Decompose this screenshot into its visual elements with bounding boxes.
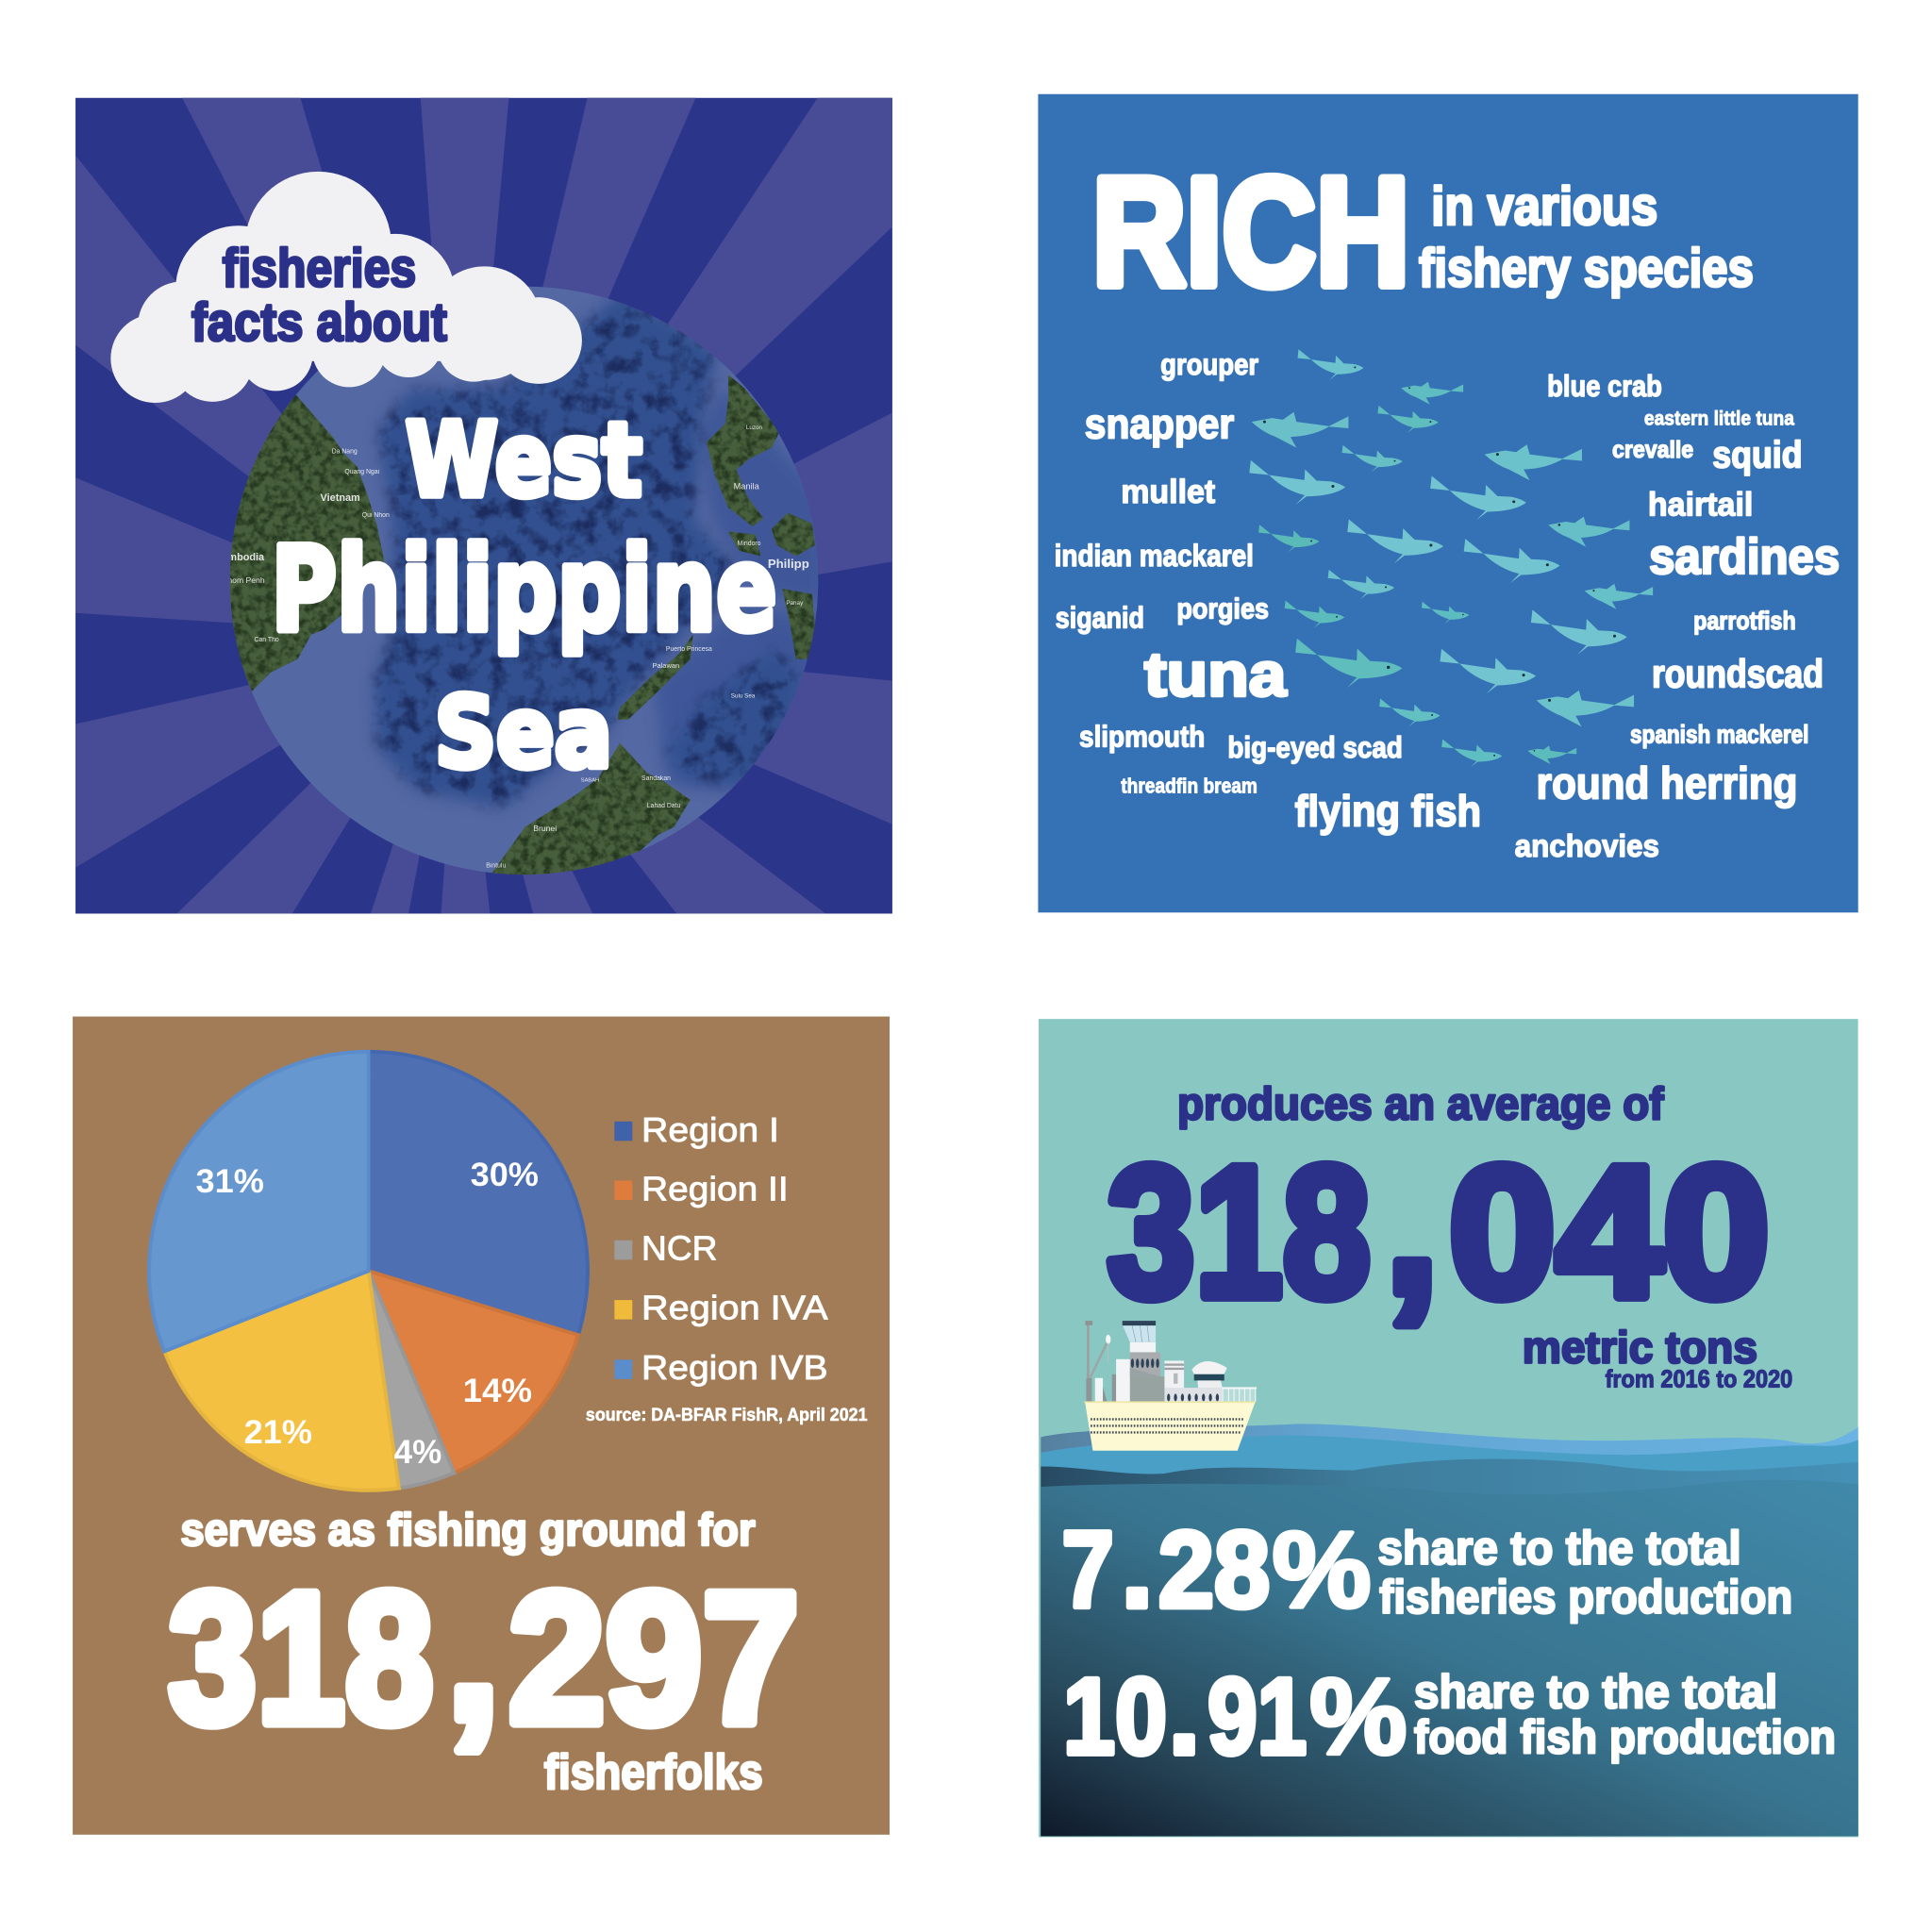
big number: 318,297: 318	[168, 1554, 434, 1762]
big number: 318,040	[1107, 1108, 1770, 1336]
stat text: food fish production: food fish production	[1414, 1711, 1836, 1764]
title: Philippine: Philippine	[271, 523, 777, 658]
satellite map circle: Brunei	[533, 824, 557, 833]
word cloud of species: crevalle	[1612, 437, 1693, 463]
legend: Region IVA	[641, 1288, 828, 1327]
title: Sea: Sea	[435, 676, 612, 790]
pie labels	[196, 1156, 539, 1471]
satellite map circle: Da Nang	[332, 448, 358, 455]
satellite map circle: Mindoro	[738, 541, 761, 547]
legend: NCR	[641, 1228, 717, 1267]
satellite map circle: Panay	[786, 600, 804, 607]
panel: fisherfolk regions	[73, 1017, 890, 1835]
satellite map circle: Lahad Datu	[647, 803, 681, 809]
pie labels: 30%	[471, 1156, 539, 1193]
panel: West Philippine Sea title	[75, 98, 892, 913]
word cloud of species	[1055, 347, 1840, 864]
word cloud of species: anchovies	[1515, 829, 1659, 864]
satellite map circle: Bintulu	[486, 863, 506, 870]
panel: rich in fishery species	[1038, 94, 1858, 912]
satellite map circle: nom Penh	[227, 575, 265, 585]
panel: production	[1039, 1019, 1858, 1837]
satellite map circle: Qui Nhon	[362, 512, 390, 519]
pie chart	[149, 1052, 588, 1491]
satellite map circle: Sulu Sea	[731, 692, 756, 699]
word cloud of species: tuna	[1144, 640, 1288, 709]
satellite map circle: Sandakan	[641, 775, 671, 782]
big number: 318,297: ,	[445, 1535, 501, 1762]
caption: from 2016 to 2020: from 2016 to 2020	[1606, 1366, 1792, 1393]
big number: 318,297: 297	[508, 1554, 799, 1762]
satellite map circle: Luzon	[746, 425, 763, 431]
caption: metric tons: metric tons	[1523, 1323, 1757, 1372]
stat text: fisheries production: fisheries production	[1379, 1571, 1792, 1624]
stat: 7.28%: 28	[1158, 1509, 1270, 1631]
word cloud of species: hairtail	[1648, 485, 1753, 523]
big number: 318,040: 318	[1107, 1127, 1371, 1336]
word cloud of species: flying fish	[1295, 786, 1481, 835]
satellite map circle: Manila	[734, 481, 760, 491]
caption: serves as fishing ground for: serves as fishing ground for	[180, 1506, 756, 1556]
satellite map circle: Puerto Princesa	[666, 646, 712, 653]
pie labels: 4%	[394, 1434, 441, 1471]
satellite map circle	[219, 269, 831, 887]
word cloud of species: big-eyed scad	[1227, 730, 1403, 764]
word cloud of species: threadfin bream	[1121, 774, 1257, 797]
satellite map circle: Quang Ngai	[344, 469, 380, 475]
pie labels: 21%	[244, 1414, 312, 1451]
stat: 7.28%: .	[1121, 1500, 1154, 1633]
satellite map circle: mbodia	[227, 552, 265, 563]
word cloud of species: mullet	[1121, 473, 1215, 510]
title: West: West	[406, 402, 642, 520]
heading: in various: in various	[1431, 176, 1657, 237]
fish school	[1249, 349, 1653, 767]
pie labels: 14%	[463, 1373, 532, 1409]
stat: 10.91%	[1063, 1647, 1407, 1779]
word cloud of species: roundscad	[1652, 652, 1824, 695]
icon: ship	[1084, 1321, 1257, 1451]
caption: fisherfolks: fisherfolks	[544, 1745, 763, 1799]
slice: Region I 30%	[369, 1052, 588, 1335]
stat: 7.28%: %	[1272, 1509, 1372, 1631]
slice: NCR 4%	[369, 1271, 454, 1489]
stat: 7.28%	[1062, 1500, 1372, 1633]
heading: fishery species: fishery species	[1419, 239, 1754, 299]
legend: Region IVB	[641, 1348, 828, 1387]
word cloud of species: sardines	[1649, 529, 1840, 585]
word cloud of species: squid	[1712, 433, 1803, 475]
slice: Region IVA 21%	[164, 1271, 399, 1491]
satellite map circle: Palawan	[653, 661, 679, 670]
stat: 10.91%: %	[1309, 1657, 1407, 1777]
word cloud of species: spanish mackerel	[1630, 721, 1808, 749]
satellite map circle: SABAH	[581, 777, 599, 783]
big number: 318,040: ,	[1384, 1108, 1440, 1336]
heading: produces an average of: produces an average of	[1177, 1079, 1664, 1130]
satellite map circle: Philipp	[768, 557, 809, 571]
satellite map circle: Vietnam	[321, 492, 360, 504]
legend	[614, 1110, 828, 1387]
word cloud of species: snapper	[1085, 400, 1234, 447]
stat: 10.91%: 91	[1208, 1657, 1307, 1777]
cloud text: facts about: facts about	[192, 292, 447, 353]
legend: Region II	[641, 1169, 789, 1208]
source note: source: DA-BFAR FishR, April 2021	[586, 1406, 868, 1425]
heading: RICH: RICH	[1092, 145, 1409, 318]
word cloud of species: round herring	[1537, 758, 1797, 808]
word cloud of species: indian mackarel	[1055, 539, 1254, 573]
slice: Region II 14%	[369, 1271, 578, 1473]
big number: 318,040: 040	[1449, 1127, 1770, 1336]
legend: Region I	[641, 1110, 779, 1149]
stat text: share to the total: share to the total	[1377, 1523, 1741, 1574]
stat text: share to the total: share to the total	[1414, 1666, 1777, 1719]
word cloud of species: porgies	[1176, 593, 1269, 625]
cloud	[110, 172, 582, 403]
word cloud of species: eastern little tuna	[1644, 408, 1794, 430]
cloud text: fisheries: fisheries	[223, 239, 416, 299]
word cloud of species: parrotfish	[1693, 607, 1796, 635]
stat: 10.91%: 10	[1063, 1657, 1167, 1777]
stat: 7.28%: 7	[1062, 1509, 1114, 1631]
slice: Region IVB 31%	[149, 1052, 369, 1351]
stat: 10.91%: .	[1168, 1647, 1201, 1779]
word cloud of species: grouper	[1160, 347, 1258, 381]
ocean waves	[1041, 1424, 1858, 1836]
sunburst background	[75, 98, 892, 913]
word cloud of species: slipmouth	[1079, 720, 1205, 754]
satellite map circle: Can Tho	[255, 637, 279, 643]
pie labels: 31%	[196, 1163, 264, 1200]
word cloud of species: blue crab	[1547, 369, 1662, 403]
big number: 318,297	[168, 1535, 799, 1762]
word cloud of species: siganid	[1056, 600, 1144, 634]
